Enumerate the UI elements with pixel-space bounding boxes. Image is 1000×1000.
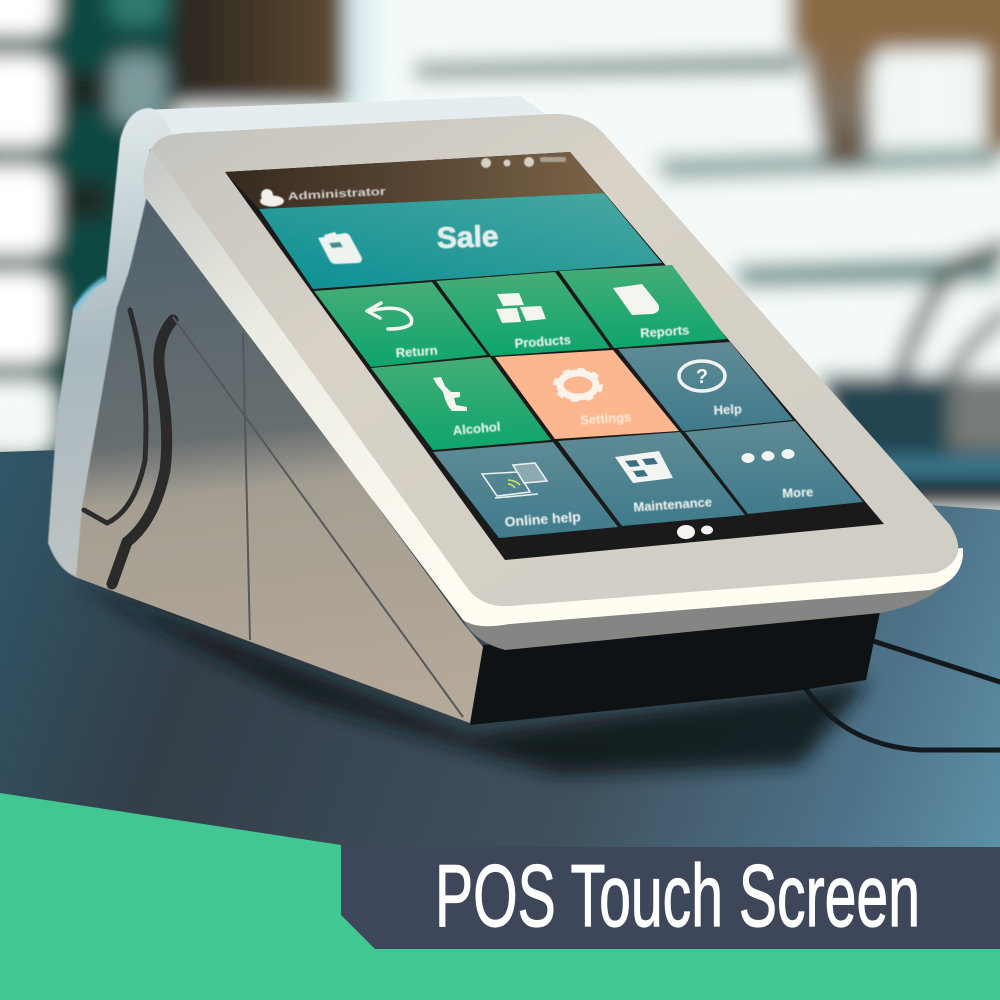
icon: three dots bbox=[742, 449, 794, 463]
sale tile bbox=[259, 193, 662, 289]
tile: help: Help bbox=[713, 401, 742, 418]
plant bbox=[790, 0, 1000, 50]
tile: products bbox=[436, 272, 610, 356]
icon: bottle bbox=[433, 377, 467, 411]
tile: more: More bbox=[782, 484, 814, 501]
icon: grid bbox=[615, 451, 673, 483]
pager dots bbox=[677, 525, 713, 539]
tile: alcohol: Alcohol bbox=[452, 419, 501, 438]
tile: reports: Reports bbox=[640, 322, 690, 341]
screen frame bbox=[225, 152, 884, 560]
housing: side panel bbox=[60, 190, 483, 723]
icon: receipt bbox=[318, 232, 362, 264]
tile: more bbox=[685, 421, 863, 514]
tile: online help bbox=[433, 442, 618, 538]
status icons bbox=[481, 157, 566, 168]
sale label: Sale bbox=[436, 220, 499, 255]
housing: hinge curves bbox=[84, 310, 173, 584]
bezel: lower lip bbox=[463, 555, 963, 650]
bezel: front face bbox=[152, 114, 958, 606]
title banner bbox=[341, 846, 1000, 949]
icon: help circle bbox=[679, 361, 725, 391]
tile: return bbox=[314, 282, 487, 367]
right lower dark objects bbox=[820, 375, 1000, 500]
tile: settings bbox=[495, 350, 679, 439]
bezel: rim bbox=[144, 147, 963, 626]
tile: maintenance: Maintenance bbox=[633, 494, 712, 515]
tile: settings: Settings bbox=[580, 409, 632, 428]
status bar bbox=[225, 152, 604, 209]
housing: seam lines bbox=[173, 317, 463, 717]
tile: online help: Online help bbox=[504, 508, 581, 530]
tile: products: Products bbox=[514, 332, 571, 351]
tile: return: Return bbox=[395, 343, 438, 360]
icon: document bbox=[613, 284, 659, 315]
tile: maintenance bbox=[558, 432, 745, 526]
icon: laptop and terminal bbox=[482, 463, 547, 498]
tile: alcohol bbox=[371, 357, 551, 450]
administrator label: Administrator bbox=[288, 186, 387, 203]
cable bbox=[800, 640, 1000, 750]
green corner banner bbox=[0, 793, 1000, 1000]
POS terminal bbox=[48, 96, 963, 725]
desk surface bbox=[0, 450, 1000, 860]
screen bbox=[225, 152, 884, 560]
blurred background: window and plants bbox=[0, 0, 1000, 530]
icon: boxes bbox=[496, 293, 546, 323]
tile: reports bbox=[559, 265, 727, 348]
icon: help circle: ? bbox=[696, 366, 708, 388]
tile: help bbox=[618, 342, 793, 431]
housing: rear top band bbox=[140, 96, 545, 135]
icon: gear bbox=[555, 370, 601, 400]
device shadow on desk bbox=[70, 582, 870, 775]
icon: user bbox=[260, 189, 284, 206]
base: dark underside bbox=[470, 612, 880, 725]
icon: return arrow bbox=[367, 303, 412, 329]
housing: rear strip bbox=[48, 108, 172, 577]
housing: blue glow bbox=[75, 278, 106, 310]
